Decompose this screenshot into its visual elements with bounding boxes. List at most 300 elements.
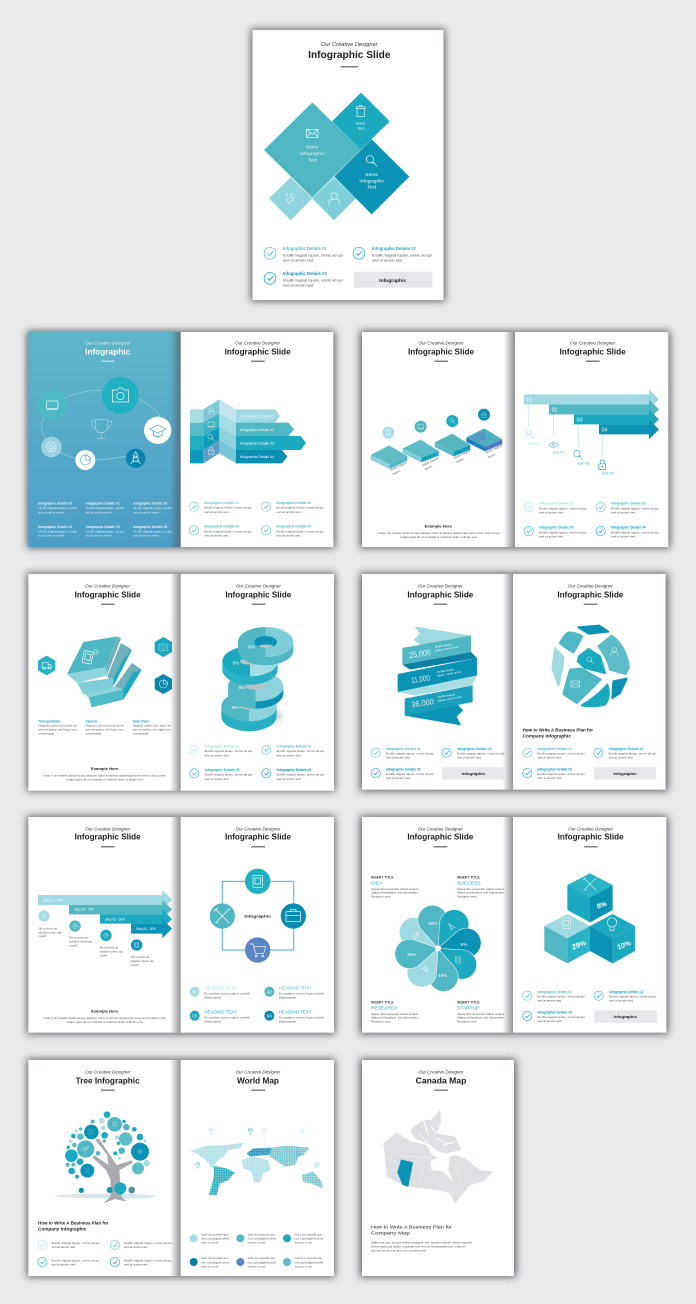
trunk: [93, 1138, 133, 1203]
detail 2: Infographic Details #2: [457, 747, 492, 751]
detail 4: Enullit magnat Iquam, omnis ad qui: [277, 773, 324, 777]
text column: transportation: [38, 719, 77, 735]
infographic button: Infographic: [613, 771, 637, 776]
infographic button: Infographic: [614, 1014, 638, 1019]
globe chart: [552, 626, 629, 706]
heading: Our Creative Designer: [568, 584, 613, 589]
example text: neque quiq de ut molestia si maiores dolor a dicam eos: [400, 535, 478, 539]
detail 2: sed at ameln sed: [372, 258, 402, 262]
circle: laptop: [37, 390, 67, 420]
six text columns: Infographic Details #2: [86, 501, 120, 505]
detail 1: sed at ameln sed: [205, 753, 229, 757]
detail 2: [262, 744, 324, 757]
detail 3: [189, 525, 252, 538]
ground: [55, 1194, 155, 1199]
text block: research: Sequa dolo sequunilis vitapto seaque: [371, 1012, 419, 1016]
cover heading: Infographic Slide: [308, 50, 391, 61]
petal: [394, 912, 446, 960]
body text: ipsum et arcus ant cui consecrtis: [371, 1249, 426, 1253]
hexagon: camera: [155, 637, 172, 657]
flower labels: 49%: [438, 973, 447, 978]
numbered item 04: 04: [267, 1013, 272, 1018]
folded arrows chart: [190, 399, 306, 463]
center dot: [435, 945, 441, 951]
petal 50%: [415, 903, 452, 951]
page: isometric steps: [362, 332, 515, 547]
text block: success: INSERT TITLE: [457, 875, 480, 879]
flow node: tools: [210, 903, 235, 929]
panel: spread 1: [28, 332, 333, 547]
donut shadow: [233, 708, 283, 724]
detail 1: Infographic Details #1: [283, 246, 327, 251]
detail 2: sed at ameln sed: [457, 756, 481, 760]
flow node: document: [245, 869, 270, 894]
text block: research: RESEARCH: [371, 1006, 398, 1012]
step 1 note: conelit: [38, 934, 46, 938]
icon column 2: Icon 02: [553, 451, 564, 455]
legend item 5: esto to ut sol: [248, 1264, 265, 1268]
detail 3: Enullit magnat Iquam, omnis ad qui: [539, 530, 587, 534]
page: step arrows: [28, 817, 181, 1033]
panel: spread 5: [28, 817, 334, 1033]
text column: data chart: [133, 719, 171, 735]
detail 3: sed at ameln sed: [537, 776, 562, 780]
detail 1: Enullit magnat Iquam, omnis ad qui: [205, 749, 252, 753]
detail 3: Infographic Details #3: [537, 1010, 572, 1014]
details block: [523, 990, 657, 1023]
cube chart: [544, 873, 635, 963]
legend item 4: [190, 1256, 230, 1268]
legend item 5: Iusto ino concelit quo: [248, 1256, 275, 1260]
ribbon 36,000: Enullit magnat: [438, 692, 455, 699]
arrow row 1: Infographic Details #1: [240, 415, 274, 419]
heading: Our Creative Designer: [236, 584, 281, 589]
step 3 note: solutem lorem qui: [99, 949, 123, 953]
text block: research: ullamcol laudant, est laboreiam: [371, 1016, 419, 1020]
arrow 03: 03: [577, 418, 583, 424]
detail 1: sed at ameln sed: [537, 756, 562, 760]
detail 1: Infographic Details #1: [537, 747, 572, 751]
detail 3: sed at ameln sed: [205, 777, 229, 781]
flower chart: [392, 903, 484, 994]
flow node: cart: [245, 937, 270, 963]
detail 4: Infographic Details #4: [277, 768, 311, 772]
Alberta highlight: [397, 1159, 413, 1187]
heading: Infographic Slide: [557, 590, 624, 599]
check item 2: Enullit magnat Iquam, omnis ad qui: [124, 1241, 172, 1245]
detail 3: Infographic Details #3: [205, 768, 239, 772]
detail 2: Infographic Details #2: [609, 990, 644, 994]
detail 3: Infographic Details #3: [204, 525, 239, 529]
text column: transportation: Nequat Lorem ipm dolor sit: [38, 724, 77, 728]
ribbon 11,000: Iquam, omnis ad qui: [437, 669, 462, 678]
hexagon: truck: [38, 656, 55, 675]
detail 3: [371, 767, 434, 780]
detail 3: [264, 271, 343, 287]
numbered item 02: HEADING TEXT: [279, 986, 312, 991]
ribbon 11,000: [398, 658, 477, 692]
detail 1: Infographic Details #1: [204, 501, 239, 505]
text column: camera: [85, 719, 124, 735]
detail 3: Enullit magnat Iquam, omnis ad qui: [204, 529, 252, 533]
example text: Omni il de repelet iandit ea quo aliquam dolor si dolorut quidemque esse rerum dolo conse: [43, 773, 166, 777]
body text: Millenius dux at cronotibis tristique nec aspelit conse ratum aspelit: [371, 1241, 472, 1245]
Canada map: [383, 1110, 493, 1203]
arrow 01: 01: [527, 398, 533, 404]
flower labels: 9%: [461, 942, 467, 947]
six text columns: Ut elit magnat Iquam, omnis: [38, 529, 77, 533]
numbered item 01: HEADING TEXT: [204, 986, 237, 991]
donut 3: 8%: [239, 685, 245, 690]
diamond: dark: Text: [367, 185, 377, 191]
diamond: top teal: Some: [356, 122, 365, 126]
example text: [43, 1009, 166, 1024]
detail 1: Infographic Details #1: [386, 747, 421, 751]
circle: rocket: [126, 449, 145, 468]
left cube: 29%: [571, 938, 588, 952]
diamond: dark: Infographic: [359, 178, 384, 184]
ribbon 36,000: 36,000: [411, 697, 435, 709]
legend item 1: [190, 1233, 230, 1245]
numbered item 03: Ex explabor nemoru siqum conetlit: [204, 1015, 249, 1019]
legend item 6: nus conciaigeint peris: [295, 1260, 323, 1264]
numbered item 04: [264, 1009, 324, 1023]
detail 1: [523, 747, 585, 760]
ribbon chart: [398, 626, 477, 725]
numbered item 03: [190, 1009, 249, 1023]
detail 1: Infographic Details #1: [537, 990, 572, 994]
heading: Canada Map: [416, 1076, 466, 1085]
top cube: 8%: [596, 900, 609, 911]
rotated step labels: Enullit magnat: [485, 443, 503, 455]
numbered item 03: Maloriquia: [204, 1019, 221, 1023]
heading: [76, 1070, 140, 1091]
six text columns: Infographic Details #6: [133, 525, 167, 529]
world map: [190, 1128, 323, 1195]
heading: World Map: [237, 1076, 279, 1085]
detail 1: [523, 990, 585, 1003]
text block: idea: IDEA: [371, 881, 383, 887]
check item 1: sed at ameln sed: [52, 1245, 75, 1249]
text block: success: ullamcol laudant, est laboreiam: [457, 891, 505, 895]
legend item 4: nus conciaigeint peris: [201, 1260, 230, 1264]
circle: pie: [75, 450, 95, 470]
leaves: [65, 1111, 150, 1194]
detail 2: Enullit magnat Iquam, omnis ad qui: [372, 253, 432, 257]
text column: camera: consequat: [85, 731, 102, 735]
details block: [524, 502, 659, 539]
detail 2: Enullit magnat Iquam, omnis ad qui: [611, 506, 659, 510]
heading: Our Creative Designer: [85, 826, 131, 831]
icon column 1: Icon 01: [528, 441, 539, 445]
example text: Omni il de repelet iandit ea quo aliquam dolor si dolorut quidemque esse rerum dolo conse: [377, 531, 500, 535]
diamond: large main: [264, 102, 361, 198]
detail 3: sed at ameln sed: [386, 776, 410, 780]
numbered item 02: Maloriquia: [279, 995, 296, 999]
subheading: How to Write A Business Plan for: [38, 1220, 109, 1225]
example text: Omni il de repelet iandit ea quo aliquam dolor si dolorut quidemque esse rerum dolo conse: [43, 1016, 166, 1020]
text column: camera: Camera: [85, 719, 97, 723]
arrow 04: 04: [602, 428, 608, 434]
subheading: [371, 1224, 452, 1237]
text column: transportation: consequat: [38, 731, 55, 735]
diamond: top teal: Text: [357, 127, 364, 131]
text block: research: [371, 1001, 419, 1024]
text column: data chart: consequat: [133, 731, 149, 735]
six text columns: Ut elit magnat Iquam, omnis: [86, 506, 125, 510]
detail 2: Infographic Details #2: [277, 744, 311, 748]
six text columns: Infographic Details #5: [86, 525, 120, 529]
page: folded arrows: [181, 332, 333, 547]
isometric step 2: [403, 421, 439, 462]
heading: Our Creative Designer: [568, 826, 614, 831]
rotated step labels: [389, 443, 503, 476]
heading: Infographic Slide: [225, 833, 292, 842]
petal: [430, 936, 482, 985]
donut 2: 8%: [233, 660, 239, 665]
subheading: How to Write A Business Plan for: [523, 728, 593, 733]
detail 2: sed at ameln sed: [611, 511, 635, 515]
legend item 1: esto to ut sol: [201, 1241, 219, 1245]
circle: graduation: [144, 417, 171, 444]
step arrows chart: [38, 890, 172, 938]
example text: [377, 524, 500, 539]
detail 4: Infographic Details #4: [276, 525, 311, 529]
detail 3: Infographic Details #3: [386, 767, 421, 771]
page: cubes: [513, 817, 666, 1033]
heading: [557, 584, 624, 605]
detail 2: Infographic Details #2: [611, 502, 646, 506]
panel: Canada map page: [362, 1060, 514, 1276]
diamond: light bottom left: [269, 177, 312, 220]
step 4 note: Sit ut enim at: [131, 955, 150, 959]
circle: gear: [41, 437, 62, 457]
detail 1: [189, 501, 252, 514]
detail 2: [594, 990, 657, 1003]
six text columns: Ut elit magnat Iquam, omnis: [133, 529, 172, 533]
infographic button: [354, 272, 432, 288]
heading: Our Creative Designer: [85, 1070, 131, 1075]
step 3 note: conelit: [99, 953, 107, 957]
heading: [75, 826, 141, 847]
detail 1: sed at ameln sed: [539, 511, 563, 515]
six text columns: ad qui sed at ameln: [38, 510, 65, 514]
icon: trophy: [91, 420, 111, 438]
text block: success: SUCCESS: [457, 881, 481, 887]
rotated step labels: Iquam,: [487, 452, 497, 459]
heading: Infographic Slide: [407, 833, 474, 842]
example text: Example Here: [91, 766, 119, 771]
petal 49%: [424, 946, 461, 994]
isometric step 3: [435, 415, 470, 456]
detail 4: [262, 768, 324, 781]
detail 4: sed at ameln sed: [277, 777, 301, 781]
check item 1: [38, 1240, 100, 1250]
legend item 3: nus conciaigeint peris: [295, 1237, 323, 1241]
heading: Our Creative Designer: [418, 826, 463, 831]
six text columns: ad qui sed at ameln: [86, 534, 112, 538]
detail 2: Infographic Details #2: [372, 246, 416, 251]
detail 2: [442, 747, 505, 760]
detail 1: [264, 246, 343, 262]
step 03: Step 03 - 50%: [105, 917, 125, 921]
detail 2: Enullit magnat Iquam, omnis ad qui: [276, 506, 324, 510]
step 2 note: solutem lorem qui: [69, 940, 93, 944]
six text columns: ad qui sed at ameln: [133, 510, 160, 514]
heading: [558, 826, 624, 847]
heading: [225, 584, 292, 605]
numbered item 01: Ex explabor nemoru siqum conetlit: [204, 991, 249, 995]
detail 1: Enullit magnat Iquam, omnis ad qui: [386, 752, 434, 756]
legend item 3: [283, 1233, 323, 1245]
step 1 note: Sit ut enim at: [38, 926, 57, 930]
heading: Infographic Slide: [407, 590, 474, 599]
detail 1: [524, 502, 587, 515]
page: globe: [513, 574, 666, 790]
stepped arrows chart: [524, 389, 659, 476]
details block: [264, 246, 432, 287]
heading: Our Creative Designer: [570, 341, 616, 346]
detail 2: Enullit magnat Iquam, omnis ad qui: [609, 752, 656, 756]
heading: [407, 826, 474, 847]
text block: success: Sequa dolo sequunilis vitapto seaque: [457, 887, 505, 891]
rotated step labels: Enullit magnat: [453, 449, 471, 460]
subheading: [38, 1220, 109, 1231]
detail 2: [596, 502, 659, 515]
infographic button: [594, 767, 656, 780]
heading: blue page: Our Creative Designer: [85, 341, 131, 346]
step 1 note: [38, 905, 62, 938]
heading: Our Creative Designer: [418, 341, 464, 346]
heading: [416, 1070, 466, 1091]
heading: [75, 584, 141, 605]
flow node: briefcase: [281, 903, 306, 929]
infographic button: Infographic: [462, 771, 486, 776]
detail 2: Enullit magnat Iquam, omnis ad qui: [457, 752, 505, 756]
diamond: light bottom middle: [312, 177, 356, 220]
detail 3: Enullit magnat Iquam, omnis ad qui: [283, 278, 343, 282]
page: blue cycle: [28, 332, 181, 547]
detail 3: Infographic Details #3: [539, 526, 574, 530]
rotated step labels: Enullit magnat: [389, 461, 408, 472]
detail 3: Enullit magnat Iquam, omnis ad qui: [386, 772, 434, 776]
flower labels: 50%: [428, 921, 438, 926]
detail 3: sed at ameln sed: [283, 283, 313, 287]
numbered item 03: 03: [192, 1013, 198, 1018]
ribbon 25,000: Enullit magnat: [434, 642, 452, 649]
panel: spread 4: [362, 574, 666, 790]
detail 4: Infographic Details #4: [611, 526, 646, 530]
ribbon 11,000: Enullit magnat: [437, 667, 455, 674]
legend item 5: nus conciaigeint peris: [248, 1260, 276, 1264]
step 3 note: Sit ut enim at: [99, 945, 118, 949]
legend item 6: esto to ut sol: [295, 1264, 312, 1268]
six text columns: Ut elit magnat Iquam, omnis: [38, 506, 77, 510]
North America: [190, 1142, 243, 1168]
legend item 6: [283, 1256, 323, 1268]
isometric step 4: [466, 409, 502, 451]
numbered item 03: HEADING TEXT: [204, 1009, 237, 1014]
arrow 02: 02: [552, 408, 558, 414]
details block: [371, 747, 505, 780]
details block: [189, 501, 324, 538]
numbered item 04: HEADING TEXT: [279, 1009, 312, 1014]
heading: Our Creative Designer: [235, 826, 281, 831]
text block: idea: INSERT TITLE: [371, 875, 394, 879]
step 1 note: solutem lorem qui: [38, 930, 62, 934]
legend item 2: [236, 1233, 276, 1245]
infographic button: [442, 767, 504, 780]
step 04: Step 04 - 30%: [136, 927, 156, 931]
text column: data chart: Data Chart: [133, 719, 150, 723]
step 2 note: [69, 914, 93, 948]
legend item 3: Iusto ino concelit quo: [295, 1233, 322, 1237]
ribbon 36,000: [405, 685, 473, 716]
isometric step 1: [371, 427, 407, 469]
text block: startup: [457, 1001, 505, 1024]
check item 2: sed at ameln sed: [124, 1245, 148, 1249]
heading: Our Creative Designer: [85, 584, 131, 589]
detail 2: Enullit magnat Iquam, omnis ad qui: [277, 749, 324, 753]
text column: transportation: est ea lorem vel fuga non: [38, 727, 77, 731]
detail 1: Enullit magnat Iquam, omnis ad qui: [537, 752, 585, 756]
rotated step labels: Iquam,: [424, 464, 433, 471]
text column: data chart: est ea lorem vel fuga non: [133, 727, 171, 731]
diamond: large main: Text: [308, 157, 318, 163]
numbered item 04: Ex explabor nemoru siqum conetlit: [279, 1015, 324, 1019]
detail 4: sed at ameln sed: [276, 534, 301, 538]
step 2 note: conelit: [69, 944, 77, 948]
subheading: Company Infographic: [523, 734, 572, 739]
detail 3: [190, 768, 252, 781]
legend item 4: esto to ut sol: [201, 1264, 219, 1268]
infographic button: [594, 1010, 657, 1023]
numbered item 01: [190, 986, 249, 999]
detail 1: Infographic Details #1: [205, 744, 239, 748]
legend item 1: Iusto ino concelit quo: [201, 1233, 229, 1237]
step 02: Step 02 - 70%: [74, 908, 95, 912]
six text columns: ad qui sed at ameln: [86, 510, 112, 514]
text block: idea: [371, 875, 419, 899]
text block: startup: ullamcol laudant, est laboreiam: [457, 1016, 505, 1020]
detail 1: [190, 744, 252, 757]
heading: [225, 826, 292, 847]
step 4 note: [131, 939, 154, 967]
check item 3: [38, 1257, 100, 1267]
detail 2: [353, 246, 432, 262]
check item 1: Enullit magnat Iquam, omnis ad qui: [52, 1241, 100, 1245]
Europe: [247, 1148, 272, 1157]
subheading: Company Infographic: [38, 1226, 87, 1231]
detail 1: Enullit magnat Iquam, omnis ad qui: [283, 253, 343, 257]
six text columns: Infographic Details #1: [38, 501, 72, 505]
page: flower: [362, 817, 513, 1033]
detail 3: sed at ameln sed: [539, 535, 563, 539]
legend item 4: Iusto ino concelit quo: [201, 1256, 229, 1260]
panel: spread 3: [28, 574, 334, 791]
ribbon 11,000: 11,000: [411, 673, 431, 685]
six text columns: Ut elit magnat Iquam, omnis: [86, 529, 125, 533]
example text: [43, 766, 166, 781]
3D stairs: [67, 636, 142, 707]
ribbon 36,000: Iquam, omnis ad qui: [438, 694, 462, 703]
step 2 note: Sit ut enim at: [69, 936, 88, 940]
detail 3: Infographic Details #3: [537, 767, 572, 771]
body text: rerum quisous dolim mauruis sus ent ve temporpetrorus cras et: [371, 1245, 465, 1249]
heading: Infographic Slide: [560, 347, 626, 356]
six text columns: ad qui sed at ameln: [38, 534, 65, 538]
detail 2: Enullit magnat Iquam, omnis ad qui: [609, 995, 657, 999]
